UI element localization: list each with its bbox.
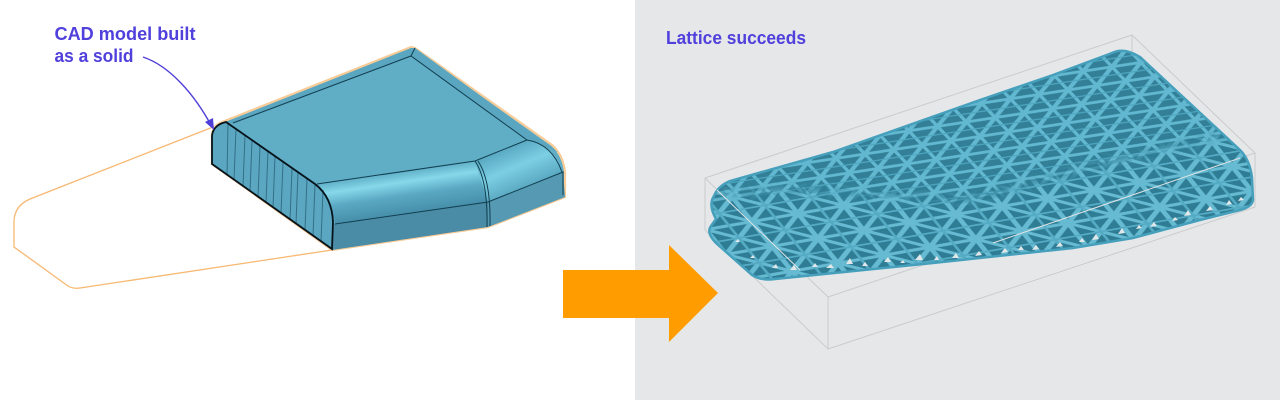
lower corner band	[488, 172, 565, 227]
callout: CAD model built as a solid	[54, 23, 196, 66]
lattice part	[708, 50, 1254, 281]
cut end face	[212, 122, 333, 249]
bounding box: front edge over lattice	[717, 158, 1240, 270]
arrow: orange process arrow	[563, 245, 718, 342]
solid silhouette	[212, 47, 565, 250]
gaps along bottom edge	[735, 197, 1244, 270]
callout: CAD model built as a solid: CAD model built	[54, 23, 196, 44]
fine upper lattice	[713, 52, 1229, 208]
CAD model: flat orange outline of full part	[14, 127, 332, 288]
back fillet strips	[226, 48, 558, 152]
arrow: callout pointer to solid end	[143, 57, 214, 130]
edge lines	[233, 48, 563, 227]
background: white left panel	[0, 0, 635, 400]
bounding box: back lines	[705, 35, 1255, 349]
callout: CAD model built as a solid: as a solid	[54, 45, 134, 66]
lower front band	[332, 202, 488, 250]
coarse lower lattice	[710, 132, 1252, 278]
end face hatching	[227, 123, 323, 242]
CAD model: solid block	[212, 47, 565, 250]
lattice rim tubes	[709, 51, 1253, 280]
corner fillet	[475, 140, 563, 202]
panel: lattice result background	[635, 0, 1280, 400]
heading: Lattice succeeds: Lattice succeeds	[666, 27, 806, 48]
end face outline	[212, 122, 333, 249]
front fillet	[317, 161, 488, 224]
